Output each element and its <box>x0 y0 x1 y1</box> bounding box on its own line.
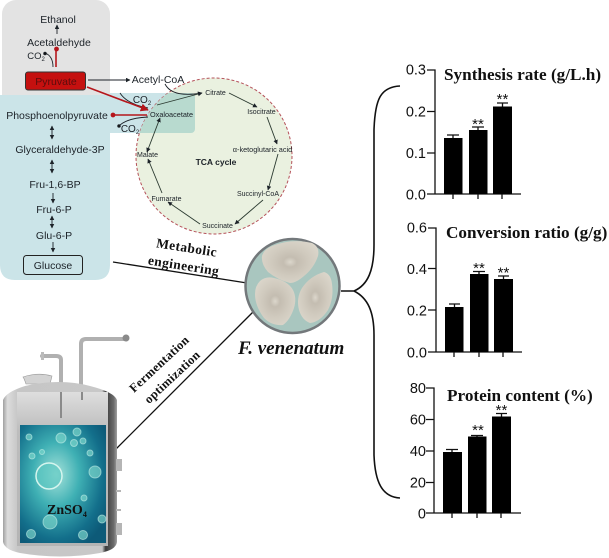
box: glucose <box>24 256 82 274</box>
label: metabolic engineering: engineering <box>147 253 220 279</box>
label: fermentation optimization: Fermentation <box>127 333 192 395</box>
label: ZnSO4: ZnSO <box>47 503 83 518</box>
icon: petri dish with F. venenatum <box>246 239 340 333</box>
chart: TCA cycle: α-ketoglutaric acid <box>233 145 292 154</box>
bar chart: synthesis rate: 0.3 <box>406 62 426 78</box>
bar chart: conversion ratio: ** <box>473 260 485 277</box>
bar chart: protein content: 60 <box>410 412 426 428</box>
pathway: glycolysis and ethanol labels: CO <box>27 51 41 62</box>
bar chart: protein content: ** <box>472 422 484 439</box>
pathway: glycolysis and ethanol labels: Phosphoenolpyruvate <box>6 110 108 122</box>
bar chart: conversion ratio <box>407 220 607 362</box>
bar chart: conversion ratio: 0.4 <box>407 262 427 278</box>
panel: ethanol branch background <box>2 0 110 120</box>
panel: glycolysis background <box>0 93 195 280</box>
pathway: glycolysis and ethanol labels: Glucose <box>34 260 72 272</box>
bar chart: conversion ratio: ** <box>498 264 509 282</box>
connector: metabolic line <box>113 262 247 283</box>
bar chart: protein content: ** <box>496 402 507 419</box>
bar chart: synthesis rate: ** <box>472 116 484 133</box>
bar chart: synthesis rate: 0.0 <box>406 188 426 204</box>
pathway: glycolysis and ethanol labels: Ethanol <box>40 14 76 26</box>
label: ZnSO4: 4 <box>83 510 87 519</box>
pathway: glycolysis and ethanol labels: Glyceraldehyde-3P <box>15 144 105 156</box>
chart: TCA cycle: Oxaloacetate <box>150 110 193 119</box>
chart: TCA cycle: Fumarate <box>152 196 182 203</box>
bar chart: synthesis rate <box>406 62 601 204</box>
chart: TCA cycle <box>137 90 292 230</box>
liquid bubbles <box>26 428 106 540</box>
tank ports <box>116 459 122 535</box>
pathway: glycolysis and ethanol labels: 2 <box>41 57 45 63</box>
label: metabolic engineering: Metabolic <box>155 235 218 260</box>
chart title: conversion ratio: Conversion ratio (g/g) <box>446 223 607 242</box>
box: pyruvate <box>26 72 86 90</box>
pathway: glycolysis and ethanol labels: Glu-6-P <box>36 230 72 242</box>
pathway: glycolysis and ethanol labels: Fru-6-P <box>36 204 72 216</box>
pathway: red arrows <box>55 47 148 117</box>
panel: oxaloacetate overlap highlight <box>140 93 195 133</box>
bar chart: protein content: 40 <box>410 444 426 460</box>
tank liquid <box>20 425 106 543</box>
pathway: glycolysis and ethanol labels: 2 <box>136 130 140 136</box>
connector: fermentation line <box>113 312 253 452</box>
label: fermentation optimization: optimization <box>142 348 203 406</box>
tank pipes <box>41 334 130 398</box>
label: metabolic engineering <box>147 235 220 279</box>
box: pyruvate: Pyruvate <box>35 76 77 88</box>
panel: TCA cycle circle <box>136 78 292 234</box>
pathway: black arrows <box>44 25 202 252</box>
chart: TCA cycle: Citrate <box>205 90 226 97</box>
pathway: glycolysis and ethanol labels: Fru-1,6-BP <box>29 179 81 191</box>
chart: TCA cycle: Succinyl-CoA <box>237 191 279 198</box>
tank body <box>3 382 117 556</box>
chart title: protein content: Protein content (%) <box>447 386 593 405</box>
bar chart: synthesis rate: ** <box>497 91 508 108</box>
tank dip tubes <box>61 392 82 418</box>
tank lid port <box>23 374 52 384</box>
bar chart: synthesis rate: 0.1 <box>406 146 426 162</box>
pathway: glycolysis and ethanol labels: 2 <box>148 101 152 107</box>
bar chart: synthesis rate: 0.2 <box>406 104 426 120</box>
bar chart: conversion ratio: 0.6 <box>407 220 427 236</box>
pathway: glycolysis and ethanol labels: CO <box>121 124 136 135</box>
chart: TCA cycle: Malate <box>137 152 158 159</box>
label: F. venenatum: F. venenatum <box>237 338 344 359</box>
chart: TCA cycle: Succinate <box>202 223 233 230</box>
bar chart: conversion ratio: 0.2 <box>407 304 427 320</box>
bracket <box>341 86 400 498</box>
bar chart: protein content: 0 <box>418 506 426 522</box>
tank inner <box>17 392 108 546</box>
bar chart: conversion ratio: 0.0 <box>407 346 427 362</box>
chart: TCA cycle: Isocitrate <box>247 109 276 116</box>
pathway: glycolysis and ethanol labels: CO <box>133 95 148 106</box>
icon: fermenter tank <box>3 334 130 556</box>
chart: TCA cycle: TCA cycle <box>196 157 237 167</box>
bar chart: protein content: 20 <box>410 476 426 492</box>
bar chart: protein content <box>410 381 593 522</box>
pathway: glycolysis and ethanol labels: Acetyl-CoA <box>132 74 184 86</box>
bar chart: protein content: 80 <box>410 381 426 397</box>
pathway: glycolysis and ethanol labels: Acetaldehyde <box>27 37 91 49</box>
chart title: synthesis rate: Synthesis rate (g/L.h) <box>444 65 601 84</box>
pathway: glycolysis and ethanol labels <box>6 14 184 272</box>
